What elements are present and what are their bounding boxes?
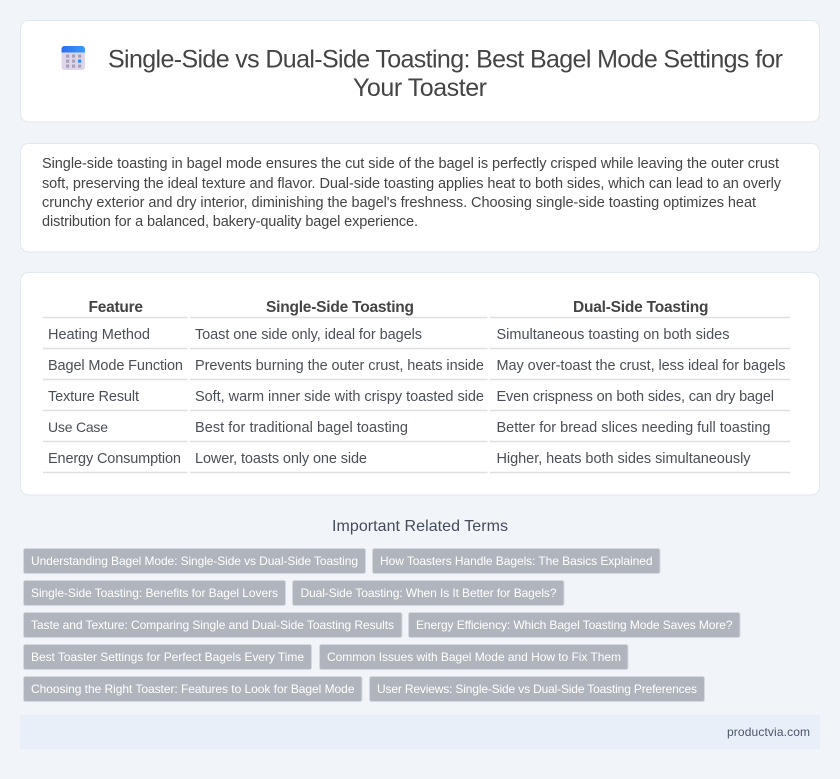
heading: important related terms: Important Related Terms: [332, 518, 508, 535]
table row: texture result: [48, 389, 774, 405]
tag: Understanding Bagel Mode: Single-Side vs Dual-Side Toasting: [31, 554, 358, 568]
panel: summary text: [20, 144, 820, 252]
table row: texture result: Texture Result: [48, 389, 139, 405]
title: Single-Side vs Dual-Side Toasting: Best Bagel Mode Settings for: [108, 46, 783, 74]
tag: [24, 676, 362, 702]
table row: heating method: [48, 327, 730, 343]
tag: [320, 644, 628, 670]
table row: heating method: Heating Method: [48, 327, 150, 343]
text block: summary: crunchy exterior and dry interior, diminishing the bagel's freshness. Choosing single-side toasting optimizes heat: [42, 195, 756, 211]
table row: heating method: Toast one side only, ideal for bagels: [195, 327, 422, 343]
title: Your Toaster: [353, 74, 487, 102]
tag: [370, 676, 704, 702]
tag: [372, 548, 660, 574]
table row: energy consumption: [48, 451, 751, 467]
table header row: Single-Side Toasting: [266, 299, 414, 316]
text block: summary: [42, 156, 782, 230]
tag: Taste and Texture: Comparing Single and Dual-Side Toasting Results: [31, 618, 394, 632]
table row: energy consumption: Lower, toasts only one side: [195, 451, 367, 467]
table row: heating method: Simultaneous toasting on both sides: [496, 327, 730, 343]
title: [108, 46, 783, 102]
table row: energy consumption: Higher, heats both sides simultaneously: [496, 451, 751, 467]
text block: summary: soft, preserving the ideal texture and flavor. Dual-side toasting applies heat to both sides, which can lead to an overly: [42, 176, 782, 192]
tag: User Reviews: Single-Side vs Dual-Side Toasting Preferences: [377, 682, 697, 696]
tag: How Toasters Handle Bagels: The Basics Explained: [380, 554, 652, 568]
tag: [24, 612, 402, 638]
text block: summary: Single-side toasting in bagel mode ensures the cut side of the bagel is perfectly crisped while leaving the outer crust: [42, 156, 779, 172]
table header row: Dual-Side Toasting: [573, 299, 708, 316]
tag: [24, 580, 286, 606]
tag: Best Toaster Settings for Perfect Bagels Every Time: [31, 650, 304, 664]
tag: Choosing the Right Toaster: Features to Look for Bagel Mode: [31, 682, 355, 696]
panel: header: [20, 20, 820, 122]
panel: comparison table: [20, 272, 820, 495]
table row: bagel mode function: Prevents burning the outer crust, heats inside: [195, 358, 484, 374]
tag: Energy Efficiency: Which Bagel Toasting Mode Saves More?: [416, 618, 733, 632]
table row: use case: Use Case: [48, 419, 108, 435]
tag: [408, 612, 740, 638]
table row: use case: [48, 419, 770, 436]
table row: texture result: Even crispness on both sides, can dry bagel: [496, 389, 774, 405]
table header row: Feature: [88, 299, 143, 316]
text block: summary: distribution for a balanced, bakery-quality bagel experience.: [42, 214, 418, 230]
footer bar: productvia.com: [727, 725, 810, 739]
table row: bagel mode function: Bagel Mode Function: [48, 358, 183, 374]
icon: calendar: [62, 46, 85, 70]
tag: Dual-Side Toasting: When Is It Better for Bagels?: [300, 586, 557, 600]
tag: [24, 548, 366, 574]
table row: energy consumption: Energy Consumption: [48, 451, 181, 467]
table row: use case: Best for traditional bagel toasting: [195, 420, 408, 436]
table row: bagel mode function: [48, 358, 786, 374]
table header row: [88, 299, 708, 316]
tag: Common Issues with Bagel Mode and How to Fix Them: [327, 650, 621, 664]
footer bar: [20, 715, 820, 749]
related term tags: [24, 548, 740, 702]
tag: [24, 644, 312, 670]
table row: bagel mode function: May over-toast the crust, less ideal for bagels: [496, 358, 786, 374]
tag: [292, 580, 564, 606]
table row: use case: Better for bread slices needing full toasting: [496, 420, 770, 436]
tag: Single-Side Toasting: Benefits for Bagel Lovers: [31, 586, 278, 600]
table row: texture result: Soft, warm inner side with crispy toasted side: [195, 389, 484, 405]
